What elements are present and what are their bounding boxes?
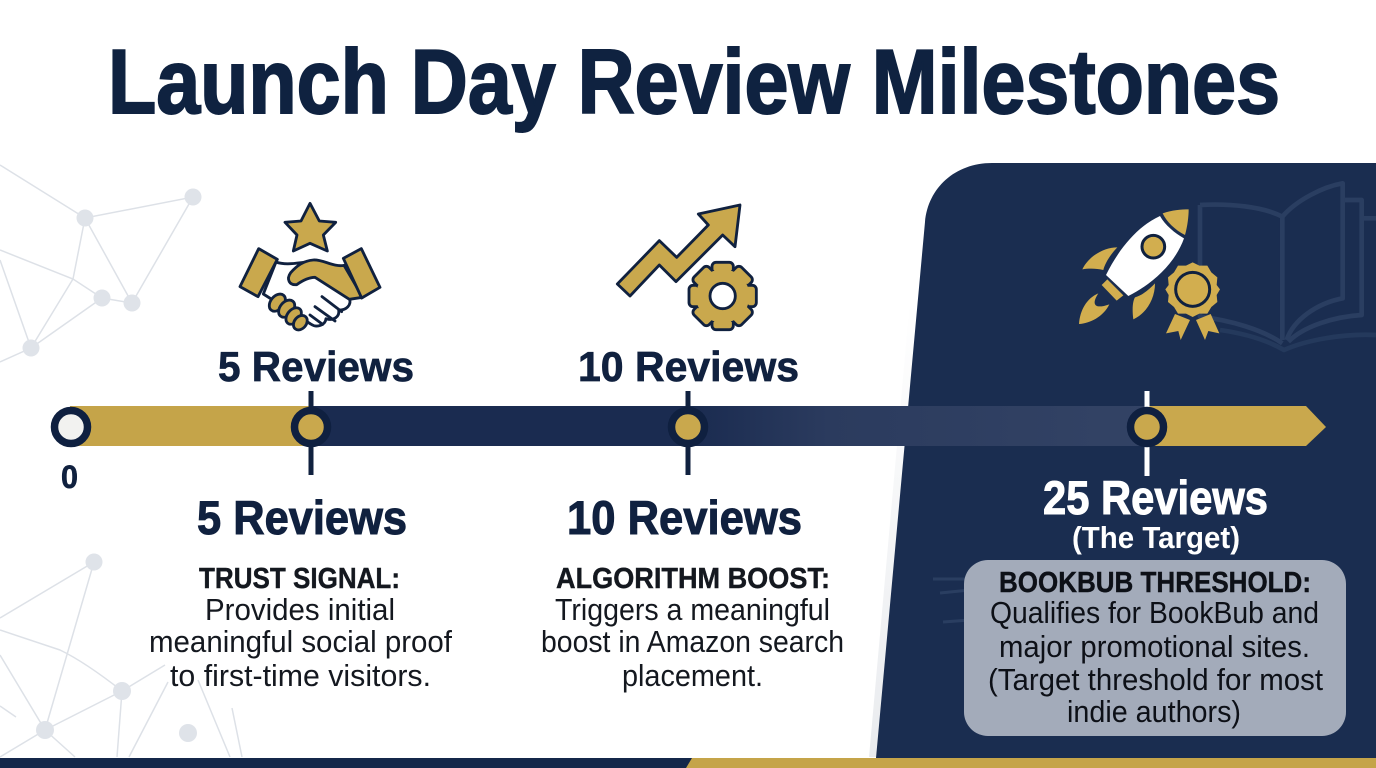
star [285,203,336,251]
description: meaningful social proof [149,624,452,659]
rocket body [1106,216,1184,296]
cuffs [240,249,277,297]
label: upper 5 reviews: 5 Reviews [218,343,414,390]
timeline progress bar [54,391,1326,476]
milestone heading: 10 Reviews [567,491,802,544]
tick marks [311,391,688,475]
callout: BookBub threshold: BOOKBUB THRESHOLD: [999,567,1311,599]
description: boost in Amazon search [541,624,844,659]
column: 10 reviews [541,491,844,693]
gold start segment [70,406,315,446]
faint speed lines [933,579,970,622]
description [541,563,844,693]
callout: BookBub threshold: Qualifies for BookBub and [990,595,1319,630]
gear [689,262,756,330]
callout: BookBub threshold: major promotional sites. [999,629,1310,664]
milestone heading: 25 Reviews [1043,471,1268,524]
gold hand [289,260,363,299]
label: zero: 0 [61,459,78,495]
icon: handshake with star [240,203,380,333]
fading segment [690,406,1150,446]
arrow [617,205,740,296]
nose [1163,209,1189,235]
award badge [1165,262,1220,340]
navy segment [311,406,691,446]
bottom band [0,758,1376,768]
label: upper 10 reviews: 10 Reviews [578,343,799,390]
icon: growth arrow with gear [617,205,756,330]
description: TRUST SIGNAL: [199,563,400,595]
background network: bottom left [0,554,242,757]
icon: rocket with award ribbon [1079,209,1220,340]
column: 25 reviews [964,471,1346,736]
callout: BookBub threshold: (Target threshold for most [988,662,1323,697]
white hand [263,261,350,326]
node: 5 reviews [294,410,328,444]
gold arrow end [1146,406,1326,446]
description: to first-time visitors. [170,658,431,693]
description: Triggers a meaningful [555,592,830,627]
panel: 25 reviews target background [869,163,1376,758]
node: 25 reviews [1130,410,1164,444]
fins and flame [1079,247,1155,324]
node: 0 [54,410,88,444]
subheading: (The Target) [1072,520,1240,555]
milestone heading: 5 Reviews [197,491,407,544]
callout: BookBub threshold [964,560,1346,736]
icon: faint open book [1200,183,1376,350]
fingers [266,291,310,333]
background network: top left [0,165,202,362]
description: ALGORITHM BOOST: [556,563,830,595]
column: 5 reviews [149,491,452,693]
callout: BookBub threshold: indie authors) [1067,694,1241,729]
node: 10 reviews [672,410,704,444]
description: placement. [622,658,763,693]
description: Provides initial [205,592,395,627]
window [1142,235,1165,258]
description [149,563,452,693]
